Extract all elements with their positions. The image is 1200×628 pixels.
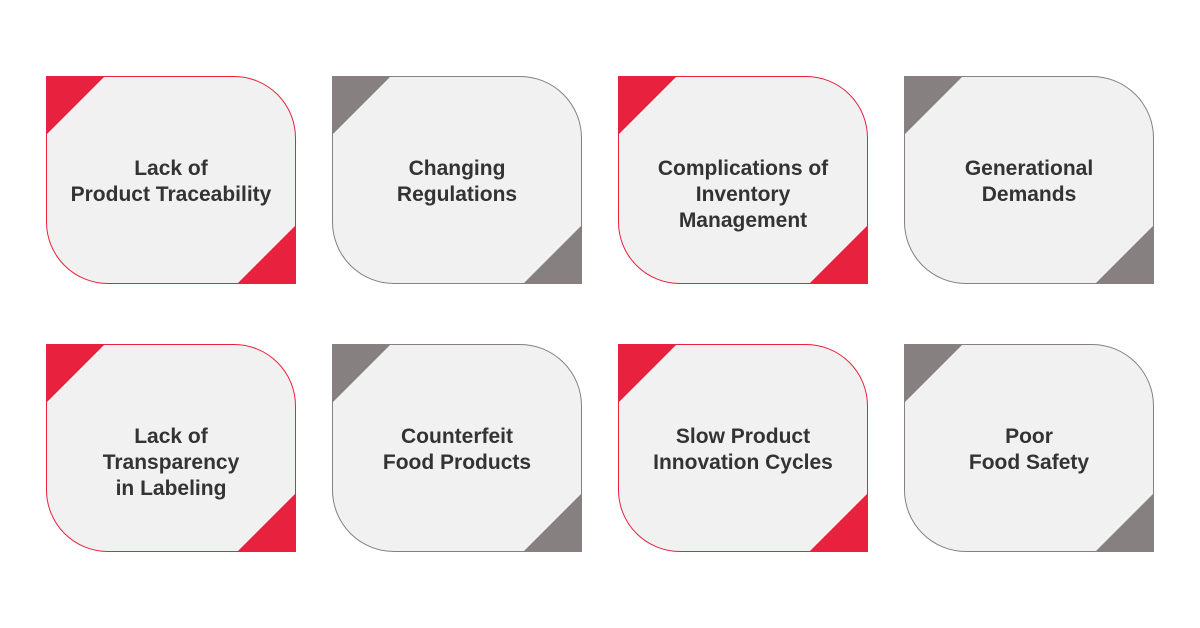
label [71,157,272,206]
label [653,425,833,474]
label: Food Safety [969,451,1089,474]
label: Innovation Cycles [653,451,833,474]
card: Complications of Inventory Management [618,76,868,284]
label: in Labeling [116,477,226,500]
label [658,157,828,232]
label: Management [679,209,807,232]
label: Generational [965,157,1093,180]
label: Lack of [134,157,208,180]
label [965,157,1093,206]
label: Slow Product [676,425,810,448]
label: Food Products [383,451,531,474]
card: Lack of Product Traceability [46,76,296,284]
label [969,425,1089,474]
label: Inventory [696,183,790,206]
label [383,425,531,474]
label: Transparency [103,451,239,474]
label: Counterfeit [401,425,513,448]
card: Generational Demands [904,76,1154,284]
card: Lack of Transparency in Labeling [46,344,296,552]
card: Poor Food Safety [904,344,1154,552]
label [103,425,240,500]
label: Changing [409,157,505,180]
label [397,157,517,206]
card: Counterfeit Food Products [332,344,582,552]
label: Poor [1005,425,1053,448]
card: Changing Regulations [332,76,582,284]
card: Slow Product Innovation Cycles [618,344,868,552]
label: Regulations [397,183,517,206]
label: Complications of [658,157,828,180]
label: Lack of [134,425,208,448]
label: Demands [982,183,1076,206]
label: Product Traceability [71,183,271,206]
